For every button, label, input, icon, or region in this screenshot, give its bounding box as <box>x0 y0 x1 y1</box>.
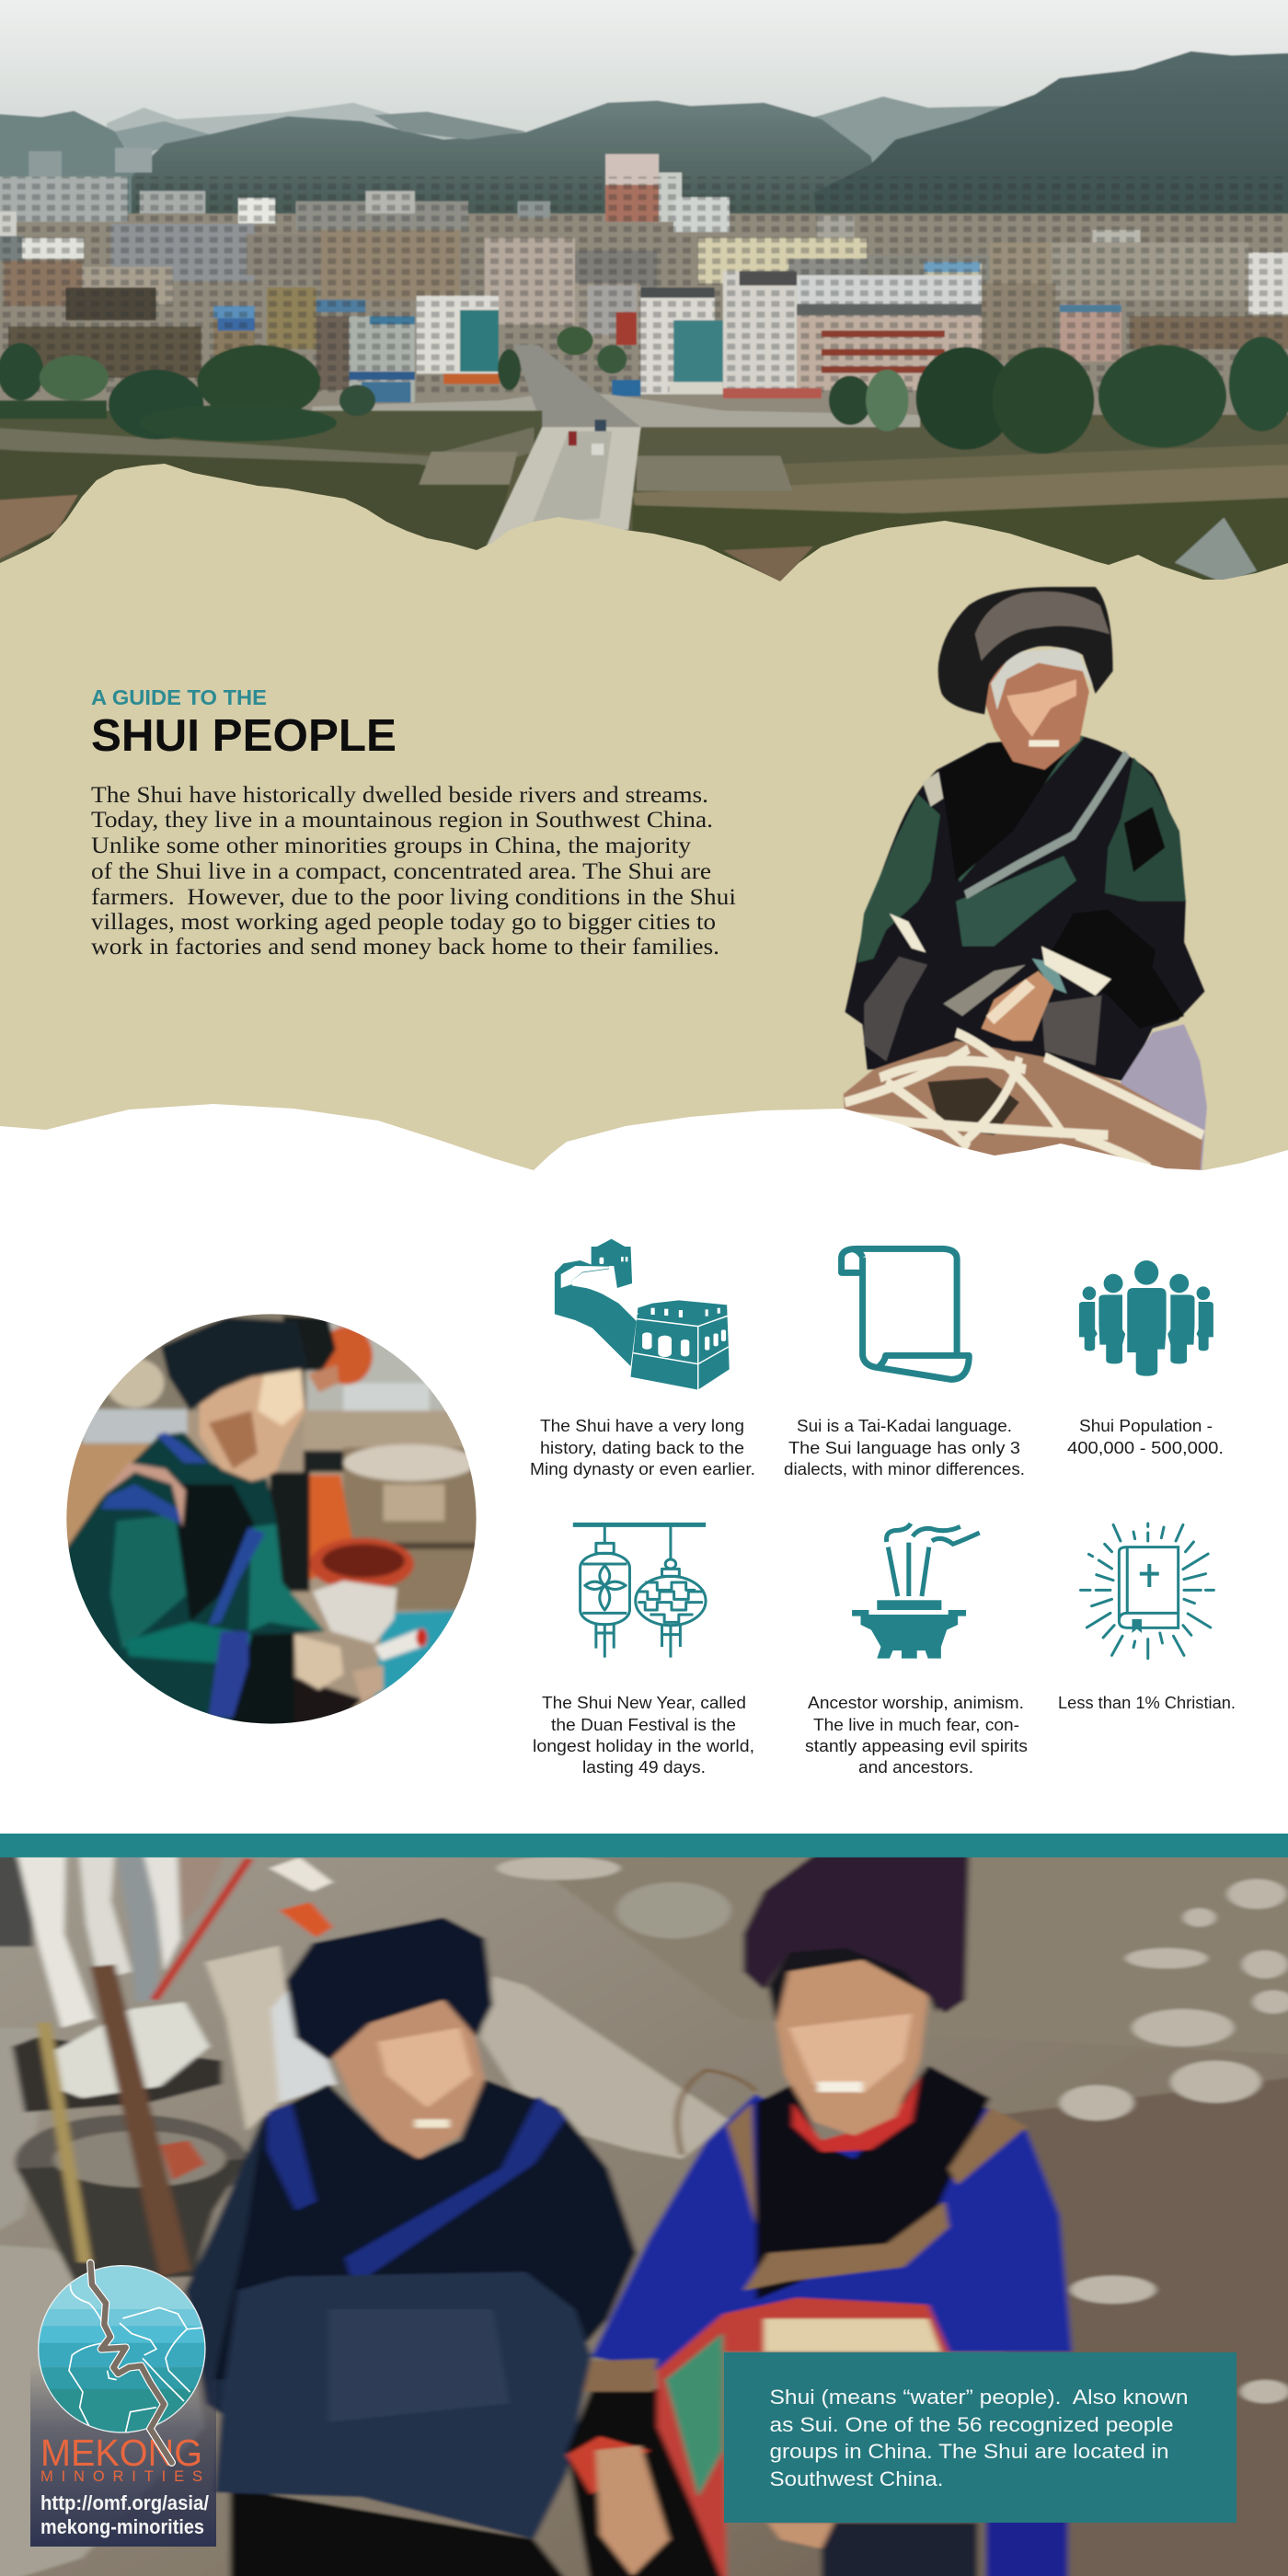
logo url <box>40 2491 209 2538</box>
trees <box>197 345 320 419</box>
logo wordmark: MEKONG <box>40 2432 202 2474</box>
logo globe and river <box>30 2263 214 2463</box>
caption: population: 400,000 - 500,000. <box>1067 1439 1224 1457</box>
circular photo: woman at market <box>66 1314 477 1724</box>
caption: new year: the Duan Festival is the <box>551 1716 736 1734</box>
street, banks and river <box>312 395 920 429</box>
callout: meaning of Shui: groups in China. The Shui are located in <box>769 2440 1168 2463</box>
caption: population <box>1067 1417 1224 1457</box>
caption: history: history, dating back to the <box>540 1439 744 1457</box>
icon: lanterns <box>573 1524 706 1658</box>
right woman <box>592 2075 1072 2371</box>
caption: new year <box>533 1694 754 1777</box>
caption: worship <box>805 1694 1028 1777</box>
icon: group of people <box>1079 1260 1213 1376</box>
captions row 1 <box>530 1417 1224 1478</box>
white torn lower paper and infographic section <box>0 1104 1288 1840</box>
teal divider band <box>0 1834 1288 1858</box>
bottom photo: two Shui women <box>0 1845 1288 2576</box>
logo subtitle: MINORITIES <box>40 2468 202 2485</box>
intro paragraph: The Shui have historically dwelled beside rivers and streams. <box>91 783 708 808</box>
caption: new year: longest holiday in the world, <box>533 1737 754 1755</box>
captions row 2 <box>533 1694 1236 1777</box>
caption: new year: lasting 49 days. <box>582 1758 706 1777</box>
intro paragraph <box>91 783 736 960</box>
caption: population: Shui Population - <box>1079 1417 1213 1435</box>
icon: incense burner <box>852 1524 980 1659</box>
caption: worship: Ancestor worship, animism. <box>808 1694 1024 1712</box>
logo url: mekong-minorities <box>40 2515 204 2538</box>
caption: language: dialects, with minor differences. <box>784 1460 1025 1478</box>
caption: worship: The live in much fear, con- <box>813 1716 1019 1734</box>
intro paragraph: Unlike some other minorities groups in China, the majority <box>91 834 692 858</box>
balusters and market clutter <box>0 1845 33 1947</box>
title: SHUI PEOPLE <box>91 711 397 761</box>
callout: meaning of Shui <box>724 2352 1236 2523</box>
torn tan paper panel <box>0 464 1288 1196</box>
icon: great wall <box>555 1239 730 1390</box>
heading block <box>91 685 397 761</box>
hero photo: town by the river <box>0 0 1288 600</box>
caption: worship: and ancestors. <box>858 1758 973 1777</box>
eyebrow: A GUIDE TO THE <box>91 685 267 709</box>
left woman <box>185 2117 271 2427</box>
caption: history: Ming dynasty or even earlier. <box>530 1460 755 1478</box>
icon: scroll <box>842 1248 969 1379</box>
caption: history <box>530 1417 755 1478</box>
callout: meaning of Shui: Southwest China. <box>769 2467 944 2490</box>
logo url: http://omf.org/asia/ <box>40 2491 209 2514</box>
caption: history: The Shui have a very long <box>540 1417 744 1435</box>
callout: meaning of Shui: as Sui. One of the 56 recognized people <box>769 2413 1174 2436</box>
caption: language: Sui is a Tai-Kadai language. <box>797 1417 1012 1435</box>
intro paragraph: Today, they live in a mountainous region in Southwest China. <box>91 808 713 833</box>
caption: christian: Less than 1% Christian. <box>1058 1694 1236 1712</box>
logo panel: Mekong Minorities <box>30 2263 216 2547</box>
caption: worship: stantly appeasing evil spirits <box>805 1737 1028 1755</box>
intro paragraph: work in factories and send money back home to their families. <box>91 935 719 960</box>
intro paragraph: villages, most working aged people today go to bigger cities to <box>91 910 716 935</box>
seated old woman with basket <box>844 587 1207 1172</box>
intro paragraph: farmers. However, due to the poor living conditions in the Shui <box>91 885 736 910</box>
callout: meaning of Shui: Shui (means “water” people). Also known <box>769 2386 1189 2409</box>
icon: bible with rays <box>1081 1524 1213 1659</box>
caption: language: The Sui language has only 3 <box>788 1439 1020 1457</box>
caption: language <box>784 1417 1025 1478</box>
panel backdrop <box>30 2364 216 2547</box>
city blocks <box>0 213 1288 415</box>
caption: new year: The Shui New Year, called <box>542 1694 746 1712</box>
intro paragraph: of the Shui live in a compact, concentrated area. The Shui are <box>91 859 711 884</box>
